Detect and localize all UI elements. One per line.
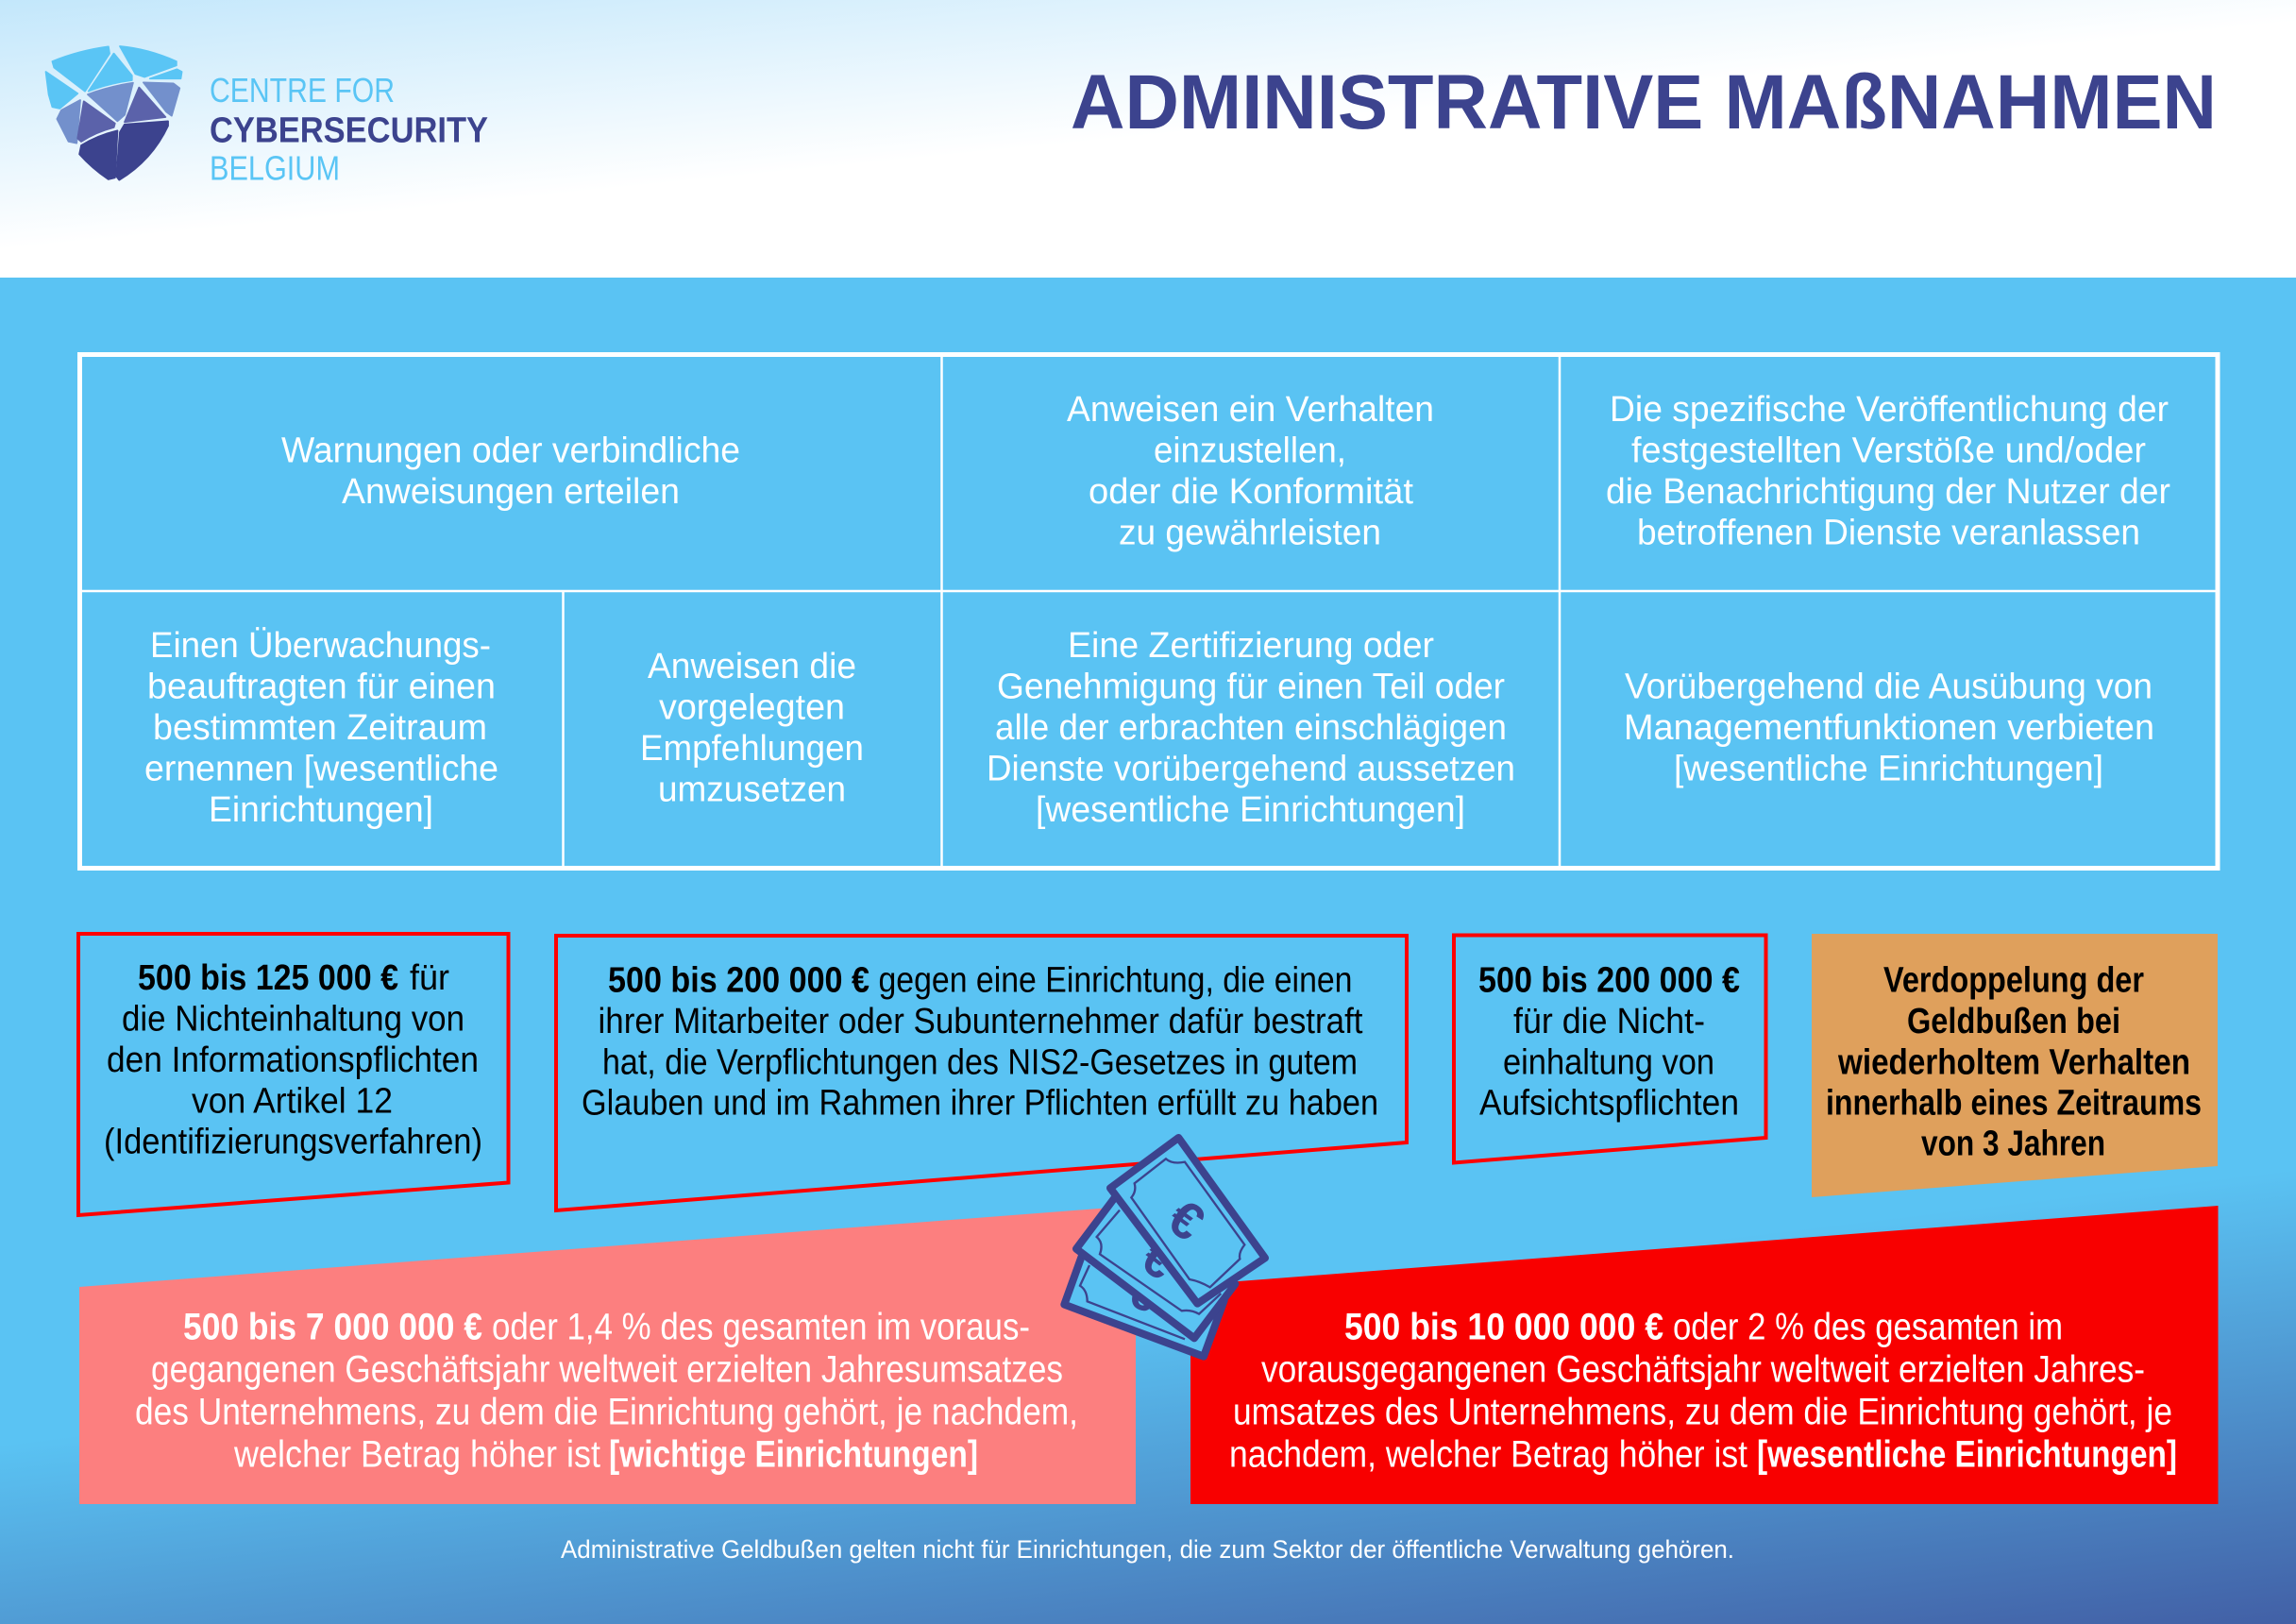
icon: shield <box>46 46 181 180</box>
box text: innerhalb eines Zeitraums <box>1826 1084 2202 1124</box>
panel: fine 200 000 supervision <box>1454 935 1765 1163</box>
cell: stop conduct: einzustellen, <box>1154 431 1346 470</box>
cell: suspend certification: alle der erbrachten einschlägigen <box>995 708 1507 748</box>
back banknote <box>1064 1249 1224 1357</box>
cell: monitoring officer <box>144 626 498 830</box>
box text: die Nichteinhaltung von <box>122 999 464 1039</box>
box text: für <box>410 958 449 998</box>
panel: fine 200 000 employees <box>556 936 1407 1210</box>
header band <box>0 0 2296 278</box>
cell: suspend certification: Dienste vorübergehend aussetzen <box>987 750 1515 789</box>
box text: 500 bis 10 000 000 € <box>1344 1307 1663 1348</box>
box text: wiederholtem Verhalten <box>1837 1042 2190 1082</box>
cell: stop conduct: Anweisen ein Verhalten <box>1067 390 1434 430</box>
cell: recommendations: umzusetzen <box>658 770 846 810</box>
cell: suspend certification <box>987 626 1515 830</box>
cell: management ban: Vorübergehend die Ausübung von <box>1625 667 2152 706</box>
pink box <box>79 1206 1136 1504</box>
box text: oder 1,4 % des gesamten im voraus- <box>492 1307 1030 1348</box>
box text: 500 bis 200 000 € <box>608 961 869 1001</box>
panel: measures table <box>79 354 2218 869</box>
box text: welcher Betrag höher ist <box>233 1433 600 1475</box>
cell: stop conduct <box>1067 390 1434 553</box>
cell: recommendations: Anweisen die <box>648 647 856 686</box>
cell: monitoring officer: Einen Überwachungs- <box>150 626 491 666</box>
cell: warnings: Anweisungen erteilen <box>342 472 680 512</box>
back banknote: € <box>1122 1264 1166 1323</box>
box text: einhaltung von <box>1503 1042 1714 1082</box>
cell: management ban: [wesentliche Einrichtungen] <box>1674 750 2103 789</box>
cell: monitoring officer: beauftragten für einen <box>147 667 496 706</box>
box text: von Artikel 12 <box>192 1082 393 1122</box>
box text: hat, die Verpflichtungen des NIS2-Gesetzes in gutem <box>602 1042 1358 1082</box>
middle banknote: € <box>1131 1229 1187 1291</box>
logo: Centre for Cybersecurity Belgium <box>46 46 488 187</box>
panel: doubling of fines <box>1812 934 2218 1197</box>
box text: 500 bis 125 000 € <box>138 958 398 998</box>
box text: für die Nicht- <box>1513 1002 1705 1041</box>
cell: warnings: Warnungen oder verbindliche <box>281 431 740 470</box>
front banknote: € <box>1157 1188 1215 1252</box>
box outline <box>78 934 508 1215</box>
box text: 500 bis 7 000 000 € <box>183 1307 482 1348</box>
box text: Geldbußen bei <box>1907 1002 2120 1041</box>
cell: monitoring officer: bestimmten Zeitraum <box>153 708 487 748</box>
box outline <box>1454 935 1765 1163</box>
box text: vorausgegangenen Geschäftsjahr weltweit erzielten Jahres- <box>1261 1348 2145 1390</box>
box text: (Identifizierungsverfahren) <box>104 1122 482 1161</box>
panel: fine important entities <box>79 1206 1136 1504</box>
cell: publication: Die spezifische Veröffentlichung der <box>1610 390 2169 430</box>
box text: ihrer Mitarbeiter oder Subunternehmer dafür bestraft <box>599 1002 1363 1041</box>
box text <box>1478 961 1740 1124</box>
cell: suspend certification: [wesentliche Einrichtungen] <box>1036 790 1465 830</box>
box outline <box>556 936 1407 1210</box>
box text: oder 2 % des gesamten im <box>1673 1307 2063 1348</box>
icon: euro banknotes <box>1064 1138 1265 1357</box>
orange box <box>1812 934 2218 1197</box>
cell: monitoring officer: Einrichtungen] <box>209 790 433 830</box>
logo text: BELGIUM <box>210 149 340 187</box>
red box <box>1190 1206 2219 1504</box>
box text <box>1826 961 2202 1163</box>
box text: [wichtige Einrichtungen] <box>609 1433 978 1475</box>
box text <box>104 958 482 1161</box>
logo text: CYBERSECURITY <box>210 111 488 151</box>
cell: stop conduct: zu gewährleisten <box>1119 514 1381 553</box>
cell: monitoring officer: ernennen [wesentliche <box>144 750 498 789</box>
logo text: CENTRE FOR <box>210 71 395 110</box>
box text: 500 bis 200 000 € <box>1478 961 1740 1001</box>
box text: nachdem, welcher Betrag höher ist <box>1229 1433 1747 1475</box>
box text: umsatzes des Unternehmens, zu dem die Einrichtung gehört, je <box>1233 1392 2172 1433</box>
cell: recommendations <box>640 647 864 810</box>
box text <box>1229 1307 2177 1475</box>
panel: fine 125 000 <box>78 934 508 1215</box>
cell: publication <box>1606 390 2170 553</box>
box text: Aufsichtspflichten <box>1479 1084 1739 1124</box>
cell: recommendations: Empfehlungen <box>640 729 864 769</box>
box text: gegangenen Geschäftsjahr weltweit erzielten Jahresumsatzes <box>151 1348 1063 1390</box>
front banknote <box>1110 1138 1265 1304</box>
box text: Verdoppelung der <box>1883 961 2144 1001</box>
cell: publication: festgestellten Verstöße und/oder <box>1631 431 2146 470</box>
cell: warnings <box>281 431 740 512</box>
cell: publication: betroffenen Dienste veranlassen <box>1637 514 2140 553</box>
title: ADMINISTRATIVE MAßNAHMEN <box>1071 59 2217 145</box>
cell: management ban <box>1624 667 2154 789</box>
footnote: Administrative Geldbußen gelten nicht für Einrichtungen, die zum Sektor der öffentliche Verwaltung gehören. <box>561 1535 1734 1564</box>
box text <box>135 1307 1078 1475</box>
box text: des Unternehmens, zu dem die Einrichtung gehört, je nachdem, <box>135 1392 1078 1433</box>
box text: [wesentliche Einrichtungen] <box>1757 1433 2177 1475</box>
box text: den Informationspflichten <box>107 1040 479 1080</box>
cell: publication: die Benachrichtigung der Nutzer der <box>1606 472 2170 512</box>
box text: von 3 Jahren <box>1921 1124 2105 1163</box>
table grid <box>79 354 2218 869</box>
middle banknote <box>1076 1194 1235 1338</box>
cell: stop conduct: oder die Konformität <box>1089 472 1413 512</box>
box text: gegen eine Einrichtung, die einen <box>878 961 1352 1001</box>
logo text <box>210 71 488 187</box>
cell: suspend certification: Eine Zertifizierung oder <box>1068 626 1434 666</box>
panel: fine essential entities <box>1190 1206 2219 1504</box>
cell: recommendations: vorgelegten <box>659 687 845 727</box>
cell: management ban: Managementfunktionen verbieten <box>1624 708 2154 748</box>
cell: suspend certification: Genehmigung für einen Teil oder <box>997 667 1505 706</box>
box text <box>582 961 1378 1124</box>
box text: Glauben und im Rahmen ihrer Pflichten erfüllt zu haben <box>582 1084 1378 1124</box>
